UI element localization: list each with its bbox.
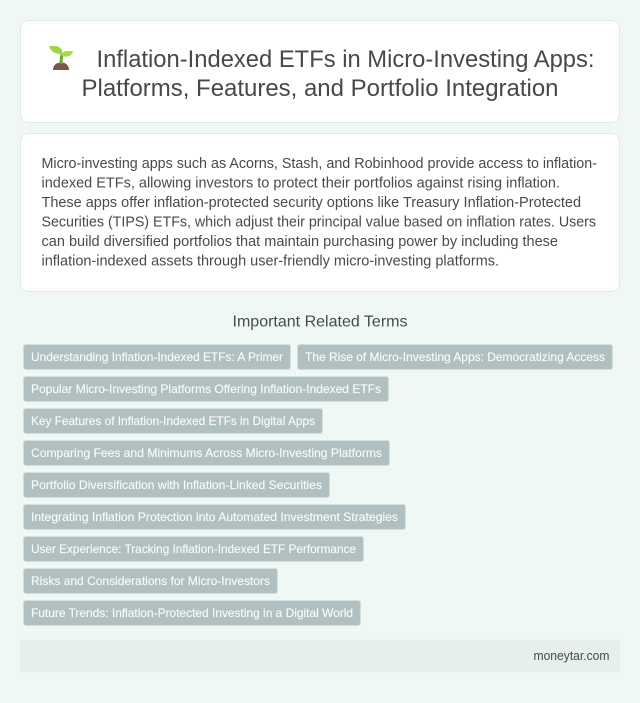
tag 8	[24, 536, 364, 562]
text block: description paragraph: indexed ETFs, allowing investors to protect their portfolios against rising inflation.	[42, 176, 560, 192]
heading: title: Platforms, Features, and Portfolio Integration	[82, 75, 558, 102]
tag 1: Understanding Inflation-Indexed ETFs: A Primer	[31, 350, 283, 364]
heading: title: Inflation-Indexed ETFs in Micro-Investing Apps:	[96, 46, 594, 73]
panel: title card	[20, 20, 620, 122]
tag 6: Portfolio Diversification with Inflation-Linked Securities	[31, 478, 322, 492]
tag 6	[24, 472, 330, 498]
tag 2	[298, 344, 612, 370]
footer text: site name: moneytar.com	[534, 648, 610, 663]
text block: description paragraph: inflation-indexed assets through user-friendly micro-investing platforms.	[42, 254, 499, 270]
panel: description	[20, 134, 620, 292]
tag 8: User Experience: Tracking Inflation-Indexed ETF Performance	[31, 542, 356, 556]
tag list	[24, 344, 612, 626]
text block: description paragraph: Micro-investing apps such as Acorns, Stash, and Robinhood provide access to inflation-	[42, 156, 597, 172]
tag 5: Comparing Fees and Minimums Across Micro-Investing Platforms	[31, 446, 382, 460]
tag 3	[24, 376, 388, 402]
text block: description paragraph: can build diversified portfolios that maintain purchasing power by including these	[42, 234, 558, 250]
tag 9: Risks and Considerations for Micro-Investors	[31, 574, 270, 588]
tag 10: Future Trends: Inflation-Protected Investing in a Digital World	[31, 606, 353, 620]
tag 4	[24, 408, 322, 434]
tag 9	[24, 568, 278, 594]
icon: seedling	[49, 46, 73, 70]
tag 5	[24, 440, 390, 466]
tag 4: Key Features of Inflation-Indexed ETFs in Digital Apps	[31, 414, 315, 428]
tag 7	[24, 504, 406, 530]
heading: title	[82, 46, 594, 102]
text block: description paragraph: These apps offer inflation-protected security options like Treasury Inflation-Protected	[42, 195, 581, 211]
tag 3: Popular Micro-Investing Platforms Offering Inflation-Indexed ETFs	[31, 382, 381, 396]
heading: important related terms: Important Related Terms	[232, 314, 408, 330]
tag 10	[24, 600, 360, 626]
text block: description paragraph: Securities (TIPS) ETFs, which adjust their principal value based on inflation rates. Users	[42, 214, 596, 230]
footer	[20, 640, 620, 672]
tag 2: The Rise of Micro-Investing Apps: Democratizing Access	[305, 350, 605, 364]
tag 7: Integrating Inflation Protection into Automated Investment Strategies	[31, 510, 398, 524]
text block: description paragraph	[42, 156, 597, 270]
tag 1	[24, 344, 290, 370]
